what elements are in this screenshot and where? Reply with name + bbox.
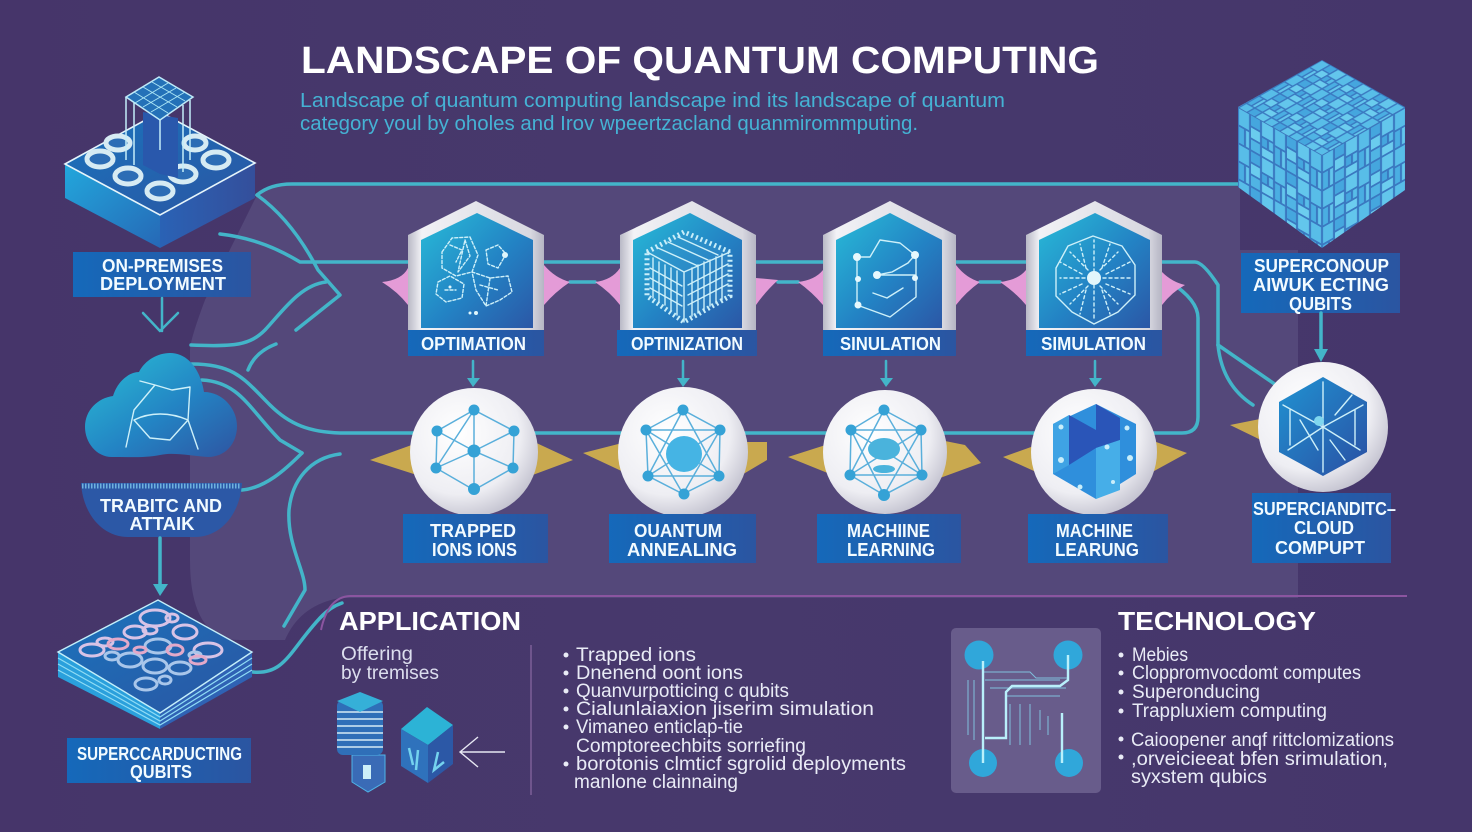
label: machine learning: MACHIINE <box>847 521 930 541</box>
pink arrows between application cards <box>382 265 1185 305</box>
vertical divider <box>530 645 532 795</box>
label: trapped ions <box>403 514 548 563</box>
bullet list: technology: syxstem qubics <box>1131 767 1267 788</box>
card: sinulation <box>823 201 956 356</box>
label: machine learning: LEARNING <box>847 540 935 560</box>
bullet list: technology: ,orveicieeat bfen srimulation, <box>1131 749 1388 770</box>
heading: application: APPLICATION <box>339 606 521 636</box>
connector lines <box>191 184 1276 672</box>
network icon <box>430 404 520 495</box>
icon: superconducting chip stack <box>58 600 252 729</box>
card art: maze cube <box>633 213 742 328</box>
gold arrows beside spheres <box>370 418 1265 478</box>
bullet list: technology: Cloppromvocdomt computes <box>1132 663 1361 684</box>
network icon <box>640 404 726 500</box>
icon: cloud <box>85 353 237 457</box>
subtitle <box>300 90 1005 135</box>
sphere: cloud computing <box>1258 362 1388 492</box>
label: superconducting qubits (left): QUBITS <box>130 762 192 782</box>
bullet list: application: borotonis clmticf sgrolid deployments <box>576 754 906 775</box>
sphere: machine learning hex <box>1031 389 1157 515</box>
sphere: machine learning <box>823 390 947 514</box>
label: machine learning 2: MACHINE <box>1056 521 1133 541</box>
arrow: cube to cloud sphere <box>1314 313 1328 362</box>
label: machine learning <box>817 514 961 563</box>
icon: server stack <box>337 692 385 792</box>
bullet list: technology: Superonducing <box>1132 682 1260 703</box>
label: quantum annealing <box>609 514 756 563</box>
label: traffic and attack: ATTAIK <box>130 514 194 534</box>
label: superconducting qubits (right): AIWUK ECTING <box>1253 275 1389 295</box>
card art: circuit graph <box>836 213 942 328</box>
label: on-premises deployment <box>73 252 251 297</box>
text: offering by premises: Offering <box>341 644 413 665</box>
bullet list: technology <box>1118 645 1394 788</box>
heading: technology: TECHNOLOGY <box>1118 606 1316 636</box>
text: offering by premises: by tremises <box>341 663 439 684</box>
bullet list: application <box>564 645 906 793</box>
panel: application <box>337 606 906 795</box>
card: simulation <box>1026 201 1162 356</box>
arrow: to box <box>460 737 505 767</box>
label: simulation <box>1026 330 1162 356</box>
label: superconducting cloud computing: COMPUPT <box>1275 538 1365 558</box>
bullet list: technology: Caioopener anqf rittclomizations <box>1131 730 1394 751</box>
icon: quantum circuit chip <box>951 628 1101 793</box>
text: offering by premises <box>341 644 439 684</box>
label: optimation: OPTIMATION <box>421 334 526 354</box>
subtitle: category youl by oholes and Irov wpeertzacland quanmirommputing. <box>300 113 918 135</box>
subtitle: Landscape of quantum computing landscape ind its landscape of quantum <box>300 90 1005 112</box>
icon: quantum box <box>401 707 453 783</box>
label: superconducting qubits (right): SUPERCONOUP <box>1254 256 1389 276</box>
bullet list: application: manlone clainnaing <box>574 772 738 793</box>
bullet list: application: Cialunlaiaxion jiserim simulation <box>576 699 874 720</box>
label: optimation <box>408 330 544 356</box>
hexagon circuit icon <box>1279 377 1367 476</box>
bullet list: application: Comptoreechbits sorriefing <box>576 736 806 757</box>
label: simulation: SIMULATION <box>1041 334 1146 354</box>
label: on-premises deployment: ON-PREMISES <box>102 256 223 276</box>
label: superconducting qubits (right): QUBITS <box>1289 294 1352 314</box>
network icon <box>844 404 928 501</box>
card: optimation <box>408 201 544 356</box>
sphere: quantum annealing <box>618 387 748 517</box>
arrows: cards to spheres <box>467 361 1102 387</box>
label: trapped ions: IONS IONS <box>432 540 517 560</box>
hexagon prism icon <box>1053 404 1136 499</box>
label: optinization: OPTINIZATION <box>631 334 743 354</box>
card art: radial octagon <box>1039 213 1150 328</box>
label: quantum annealing: OUANTUM <box>634 521 722 541</box>
card art: optimation <box>421 213 533 328</box>
card: optinization <box>617 201 757 356</box>
label: quantum annealing: ANNEALING <box>627 540 737 560</box>
label: machine learning 2 <box>1028 514 1168 563</box>
bullet list: application: Dnenend oont ions <box>576 663 743 684</box>
bullet list: technology: Trappluxiem computing <box>1132 701 1327 722</box>
label: superconducting qubits (right) <box>1241 253 1400 314</box>
label: traffic and attack <box>81 483 242 537</box>
label: sinulation: SINULATION <box>840 334 941 354</box>
icon: on-premises platform <box>65 77 255 248</box>
section divider <box>321 596 1407 630</box>
panel: technology <box>951 606 1394 793</box>
label: machine learning 2: LEARUNG <box>1055 540 1139 560</box>
label: superconducting qubits (left) <box>67 738 251 783</box>
label: optinization <box>617 330 757 356</box>
label: on-premises deployment: DEPLOYMENT <box>100 274 226 294</box>
arrow: cloud to qubit chip <box>153 538 168 596</box>
central lighter panel <box>190 184 1298 640</box>
label: sinulation <box>823 330 956 356</box>
bullet list: application: Trapped ions <box>576 645 696 666</box>
title: LANDSCAPE OF QUANTUM COMPUTING <box>301 40 1099 82</box>
label: trapped ions: TRAPPED <box>430 521 516 541</box>
bullet list: application: Quanvurpotticing c qubits <box>576 681 789 702</box>
icon: qubit cube <box>1238 60 1405 248</box>
bullet list: technology: Mebies <box>1132 645 1188 666</box>
arrow: deployment to cloud <box>143 298 178 331</box>
label: superconducting qubits (left): SUPERCCARDUCTING <box>77 744 242 764</box>
bullet list: application: Vimaneo enticlap-tie <box>576 717 743 738</box>
label: superconducting cloud computing: SUPERCIANDITC– <box>1253 499 1396 519</box>
label: traffic and attack: TRABITC AND <box>100 496 222 516</box>
label: superconducting cloud computing: CLOUD <box>1294 518 1354 538</box>
sphere: trapped ions <box>410 388 538 516</box>
label: superconducting cloud computing <box>1252 493 1396 563</box>
